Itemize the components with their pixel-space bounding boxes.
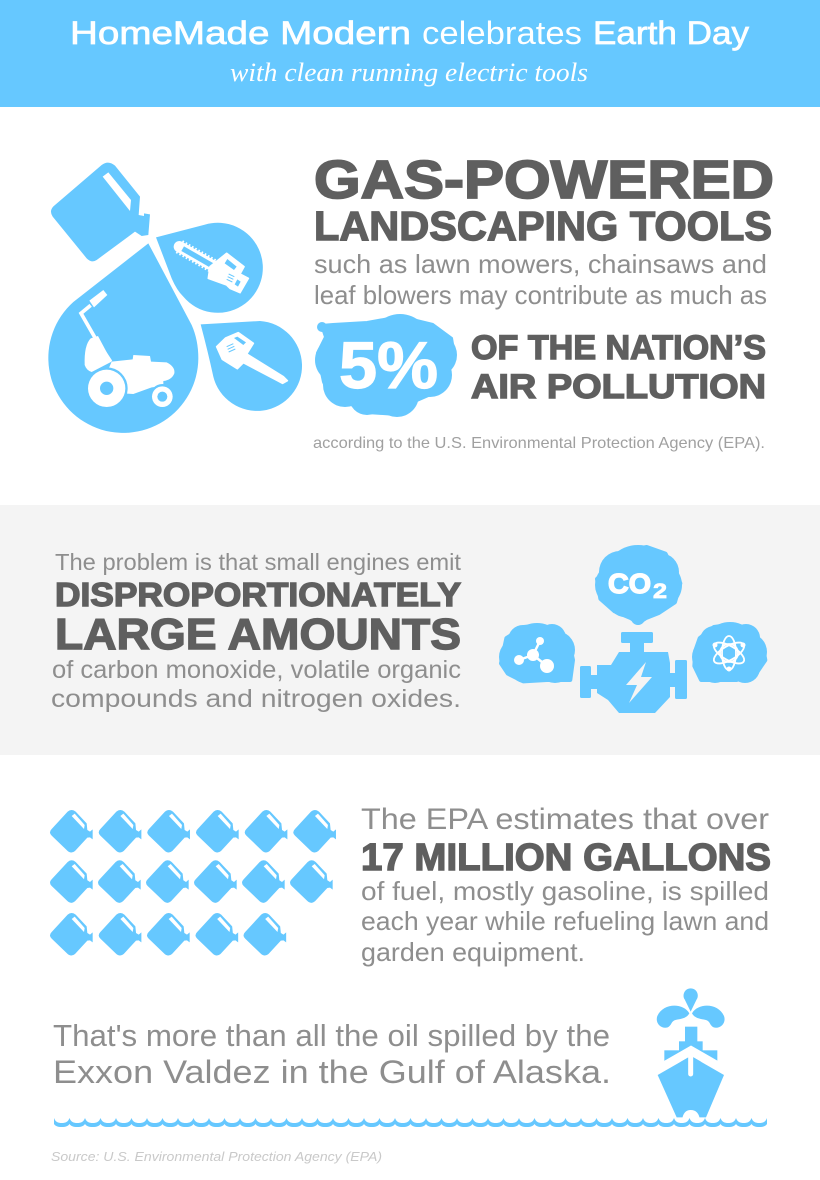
chart: pictogram of 17 gas cans bbox=[50, 810, 336, 956]
title bbox=[70, 15, 749, 51]
text: tools description bbox=[314, 249, 767, 310]
text: fuel spilled bbox=[361, 876, 769, 967]
icon: molecule cloud bbox=[499, 623, 575, 683]
heading: disproportionately large amounts: DISPROPORTIONATELY bbox=[55, 576, 461, 613]
icon: waves bbox=[54, 1116, 767, 1130]
icon: atom cloud bbox=[692, 622, 767, 683]
heading: gas-powered: GAS-POWERED bbox=[314, 150, 774, 210]
callout: 5 percent cloud bbox=[315, 314, 457, 417]
text: pollutants bbox=[51, 656, 461, 713]
text: Exxon Valdez comparison bbox=[53, 1018, 611, 1090]
callout: 5 percent cloud: 5% bbox=[339, 328, 438, 402]
icon: spouting ship bbox=[653, 988, 729, 1120]
heading: of the nation's air pollution bbox=[471, 329, 766, 406]
text: tools description: such as lawn mowers, chainsaws and bbox=[314, 249, 767, 279]
title: Earth Day bbox=[593, 15, 749, 51]
panel: small engines bbox=[0, 505, 820, 755]
icon: CO2 cloud: CO bbox=[608, 568, 651, 599]
icon: CO2 cloud bbox=[595, 545, 682, 625]
icon: leaf blower drop bbox=[201, 321, 302, 411]
icon: gas can bbox=[51, 163, 150, 261]
icon: engine bbox=[580, 632, 687, 713]
text: Exxon Valdez comparison: Exxon Valdez in the Gulf of Alaska. bbox=[53, 1054, 611, 1090]
heading: disproportionately large amounts: LARGE AMOUNTS bbox=[55, 610, 461, 659]
text: tools description: leaf blowers may contribute as much as bbox=[314, 280, 767, 310]
subtitle: with clean running electric tools bbox=[230, 58, 588, 87]
text: EPA attribution: according to the U.S. Environmental Protection Agency (EPA). bbox=[313, 435, 765, 452]
header banner bbox=[0, 0, 820, 107]
heading: landscaping tools: LANDSCAPING TOOLS bbox=[314, 203, 772, 249]
icon: chainsaw drop bbox=[156, 223, 263, 313]
icon: CO2 cloud: 2 bbox=[653, 580, 667, 603]
text: problem intro: The problem is that small engines emit bbox=[55, 549, 462, 575]
text: fuel spilled: each year while refueling lawn and bbox=[361, 906, 769, 936]
icon group: gas can and tool drops bbox=[48, 163, 302, 433]
heading: 17 million gallons: 17 MILLION GALLONS bbox=[361, 837, 771, 879]
text: fuel spilled: of fuel, mostly gasoline, is spilled bbox=[361, 876, 769, 906]
text: fuel spilled: garden equipment. bbox=[361, 937, 585, 967]
heading: disproportionately large amounts bbox=[55, 576, 461, 659]
source note: Source: U.S. Environmental Protection Agency (EPA) bbox=[51, 1149, 382, 1164]
title: HomeMade Modern bbox=[70, 15, 411, 51]
title: celebrates bbox=[422, 15, 582, 51]
icon: lawn mower drop bbox=[48, 243, 198, 433]
heading: of the nation's air pollution: AIR POLLUTION bbox=[471, 368, 766, 406]
text: pollutants: compounds and nitrogen oxides. bbox=[51, 685, 461, 713]
text: EPA estimate: The EPA estimates that over bbox=[361, 803, 769, 836]
text: Exxon Valdez comparison: That's more than all the oil spilled by the bbox=[53, 1018, 610, 1053]
heading: of the nation's air pollution: OF THE NATION’S bbox=[471, 329, 766, 367]
text: pollutants: of carbon monoxide, volatile organic bbox=[52, 656, 461, 684]
